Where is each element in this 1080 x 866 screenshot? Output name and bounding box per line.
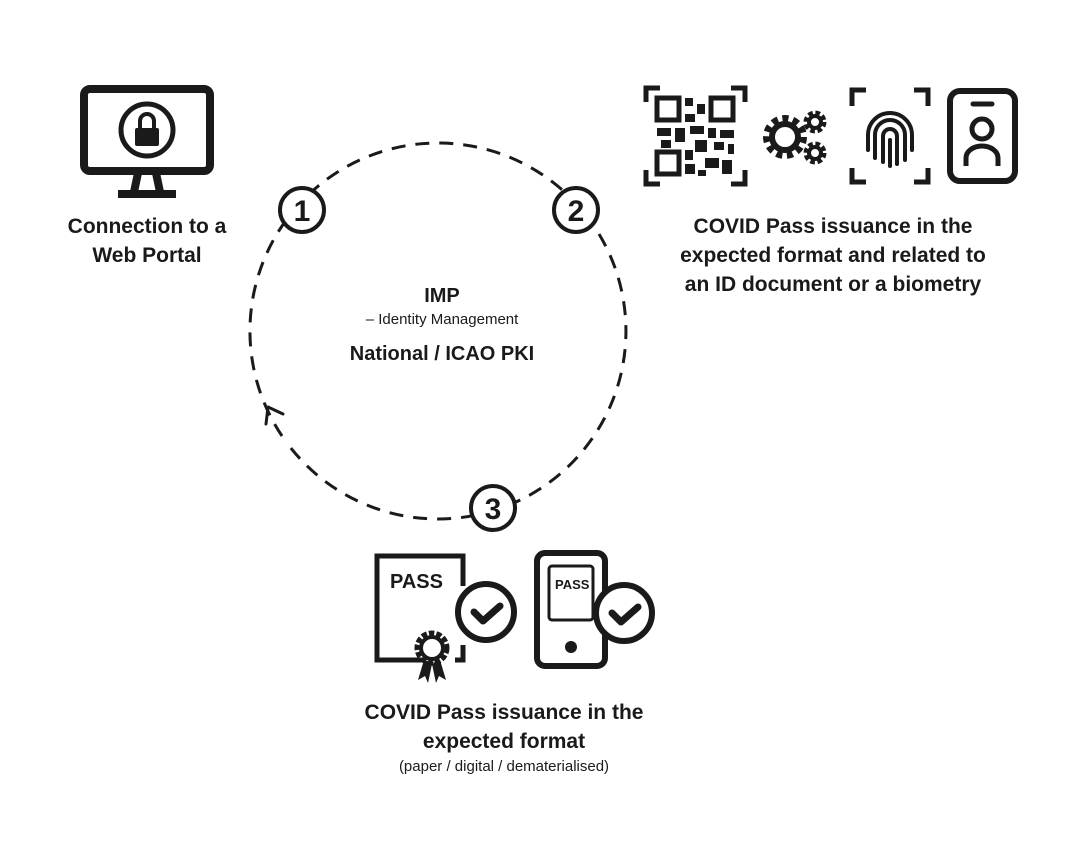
text: center label: – Identity Management bbox=[366, 311, 518, 328]
text: step 2 label: expected format and related to bbox=[680, 244, 986, 267]
icon: paper pass with seal bbox=[377, 556, 514, 683]
text: step 1 label: Connection to a bbox=[68, 215, 226, 238]
text: step 2 label bbox=[680, 215, 986, 296]
icon: QR code bbox=[646, 88, 745, 184]
text: step 2 label: COVID Pass issuance in the bbox=[694, 215, 972, 238]
text: step 3 label: COVID Pass issuance in the bbox=[365, 701, 643, 724]
icon: monitor with lock bbox=[84, 89, 210, 198]
icon: paper pass with seal: PASS bbox=[390, 571, 443, 593]
icon: ID badge bbox=[950, 91, 1015, 181]
text: center label bbox=[350, 285, 534, 365]
icon: phone pass bbox=[537, 553, 652, 666]
icon: gears bbox=[768, 114, 823, 161]
cycle: dashed circle bbox=[250, 143, 626, 519]
text: step 1 label: Web Portal bbox=[92, 244, 202, 267]
text: step 1 label bbox=[68, 215, 226, 267]
number 3: 3 bbox=[485, 493, 501, 526]
text: center label: National / ICAO PKI bbox=[350, 343, 534, 365]
text: step 3 label: (paper / digital / dematerialised) bbox=[399, 758, 609, 775]
number 2 bbox=[554, 188, 598, 232]
text: step 3 label bbox=[365, 701, 643, 775]
text: step 2 label: an ID document or a biometry bbox=[685, 273, 981, 296]
number 2: 2 bbox=[568, 195, 584, 228]
number 1 bbox=[280, 188, 324, 232]
icon: phone pass: PASS bbox=[555, 577, 590, 592]
icon: fingerprint scan bbox=[852, 90, 928, 182]
number 3 bbox=[471, 486, 515, 530]
text: center label: IMP bbox=[424, 285, 460, 307]
text: step 3 label: expected format bbox=[423, 730, 585, 753]
number 1: 1 bbox=[294, 195, 310, 228]
arrow head bbox=[266, 407, 283, 424]
